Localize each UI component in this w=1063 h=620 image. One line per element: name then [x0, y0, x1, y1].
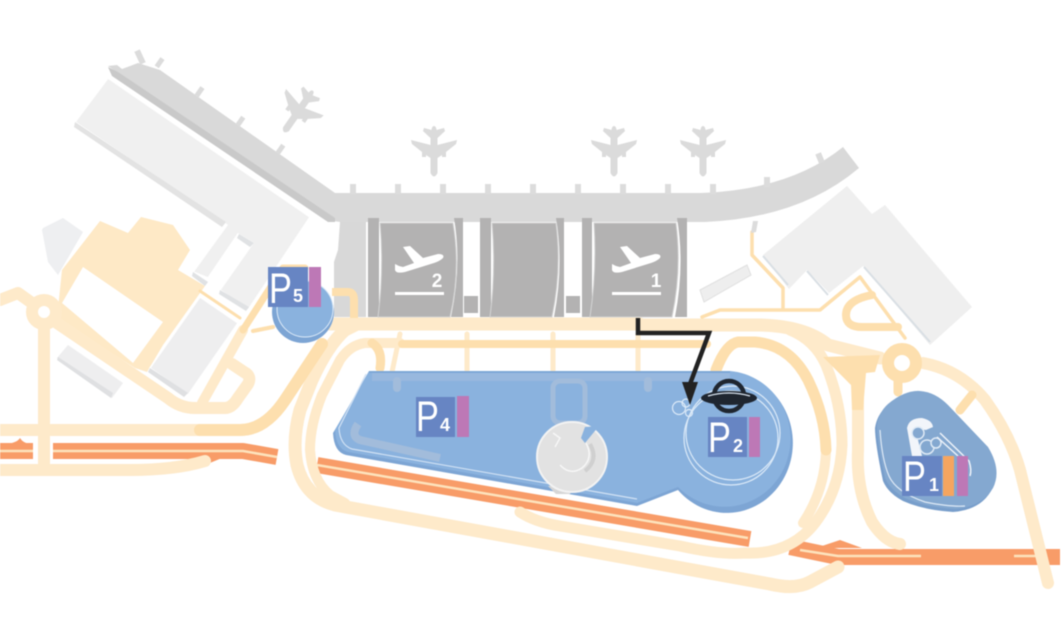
label: terminal number 1: 1: [651, 271, 662, 292]
label: P1 sign: 1: [929, 475, 939, 495]
icon: white P1 access ramps: [907, 418, 971, 476]
panel: P1 car park: [875, 391, 997, 512]
terminal 2: [368, 218, 463, 317]
west building beige block: [57, 217, 205, 372]
ring road around P4: [295, 325, 838, 587]
label: P5 sign: P: [269, 265, 292, 313]
arrow: route to P2: [638, 318, 709, 405]
P2 rings: [672, 386, 780, 485]
east pale building: [700, 186, 972, 345]
roundabouts: [32, 300, 916, 377]
label: P5 sign: 5: [293, 286, 303, 306]
label: P1 sign: [902, 453, 968, 501]
pale ramp shapes: [354, 381, 648, 458]
icon: departing plane 2: [395, 246, 443, 273]
icons: parked aircraft: [265, 78, 726, 176]
label: P2 sign: P: [708, 414, 731, 462]
label: P4 sign: P: [416, 393, 439, 441]
label: P4 sign: 4: [440, 415, 450, 435]
strands to the east: [640, 325, 880, 358]
orange highway: [0, 438, 1060, 557]
west pale buildings: [42, 78, 310, 398]
terminal 1: [582, 218, 687, 317]
icon: black parking symbol: [701, 381, 757, 411]
panel: P4 and P2 car park: [333, 371, 793, 513]
lower spur road right: [923, 363, 1048, 583]
road network: [0, 217, 1048, 587]
label: P1 sign: P: [903, 453, 926, 501]
central grey roundabout building: [537, 422, 607, 494]
label: P5 sign: [268, 265, 321, 313]
label: P2 sign: [708, 414, 760, 462]
darker access roads: [200, 232, 972, 450]
road loop beside P5: [332, 292, 354, 318]
icon: departing plane 1: [612, 246, 660, 273]
panel: P5 car park: [272, 281, 334, 343]
terminal concourse and piers: [108, 49, 859, 317]
inner road to P2: [520, 330, 842, 553]
west roads: [0, 293, 32, 303]
label: terminal number 2: 2: [432, 271, 442, 292]
label: P2 sign: 2: [733, 436, 743, 456]
main kerb road: [330, 318, 640, 330]
central terminal block: [464, 218, 580, 317]
label: P4 sign: [416, 393, 469, 441]
